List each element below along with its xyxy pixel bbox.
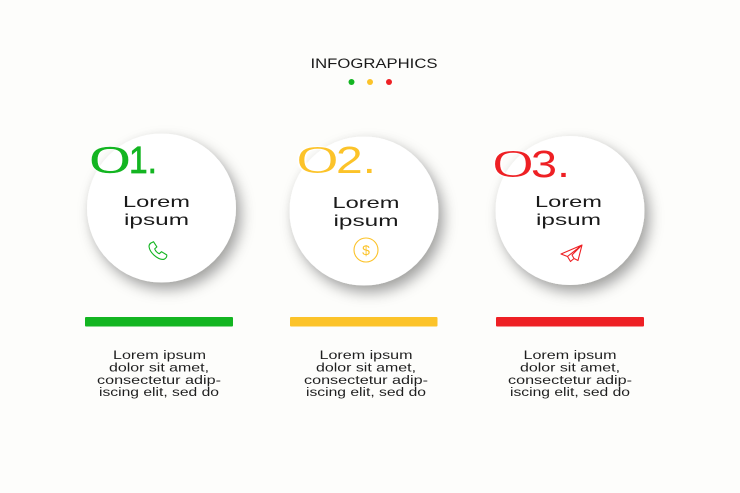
text block 3: consectetur adip- [508, 373, 632, 387]
circle card 01 [87, 134, 236, 282]
bar: yellow [290, 317, 438, 326]
text block 3: iscing elit, sed do [510, 385, 630, 399]
text block 1 [97, 348, 221, 399]
icon: phone [149, 242, 167, 259]
number 01: 1. [129, 140, 157, 182]
text block 2: dolor sit amet, [316, 360, 416, 374]
text block 1: dolor sit amet, [109, 360, 209, 374]
heading 02: ipsum [334, 213, 398, 230]
icon: dollar coin: $ [362, 242, 370, 258]
heading 01 [123, 194, 190, 229]
panel: step 02 [290, 136, 438, 286]
number 03: 3. [531, 144, 570, 186]
icon: dollar coin [354, 238, 378, 262]
heading 03: Lorem [535, 194, 602, 211]
heading 02 [332, 195, 400, 230]
text block 1: iscing elit, sed do [99, 385, 219, 399]
text block 1: Lorem ipsum [113, 348, 206, 362]
heading 02: Lorem [332, 195, 400, 212]
number 01: 0 [88, 140, 132, 182]
icon: paper plane [561, 245, 582, 262]
bar: red [496, 317, 644, 326]
circle card 02 [290, 136, 438, 286]
panel: step 01 [87, 134, 236, 282]
number 03: 0 [491, 144, 535, 186]
heading 01: Lorem [123, 194, 190, 211]
text block 2: Lorem ipsum [320, 348, 412, 362]
number 02: 2. [336, 140, 376, 182]
text block 3: Lorem ipsum [524, 348, 616, 362]
heading 03: ipsum [536, 212, 601, 229]
text block 3: dolor sit amet, [520, 360, 620, 374]
title dots [348, 79, 392, 85]
circle card 03 [496, 136, 644, 285]
number 02: 0 [295, 140, 340, 182]
heading 03 [535, 194, 602, 229]
panel: step 03 [491, 136, 644, 285]
text block 2 [304, 348, 428, 399]
text block 2: consectetur adip- [304, 373, 428, 387]
title: INFOGRAPHICS [310, 56, 438, 71]
bar: green [85, 317, 233, 326]
text block 2: iscing elit, sed do [306, 385, 426, 399]
text block 3 [508, 348, 632, 399]
heading 01: ipsum [124, 212, 189, 229]
text block 1: consectetur adip- [97, 373, 221, 387]
